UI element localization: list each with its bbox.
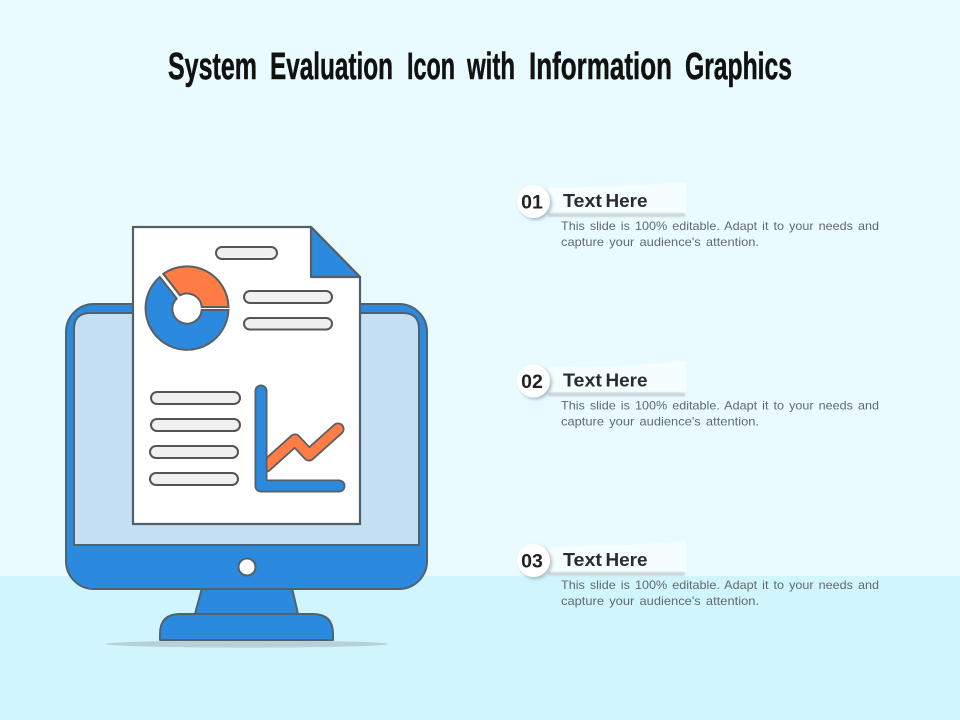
title: with: [466, 46, 515, 88]
item body: capture your audience's attention.: [561, 594, 759, 608]
item 01: [517, 182, 879, 249]
item 02: [517, 362, 879, 428]
item 02: 02: [521, 371, 543, 393]
number badge: [517, 364, 550, 398]
item body: This slide is 100% editable. Adapt it to your needs and: [561, 219, 879, 233]
document page: [133, 227, 360, 524]
item body: capture your audience's attention.: [561, 414, 759, 428]
title: Graphics: [685, 46, 792, 88]
item heading: Text: [563, 370, 602, 390]
title: Evaluation: [270, 46, 393, 88]
monitor screen: [74, 313, 419, 545]
number badge: [517, 544, 550, 577]
item heading: Here: [606, 191, 648, 211]
item 01: 01: [521, 192, 543, 214]
item heading: Text: [563, 191, 602, 211]
item heading: Text: [563, 550, 602, 570]
number badge: [517, 185, 550, 218]
item heading: Here: [606, 370, 648, 390]
item heading: [563, 550, 648, 570]
item body: capture your audience's attention.: [561, 235, 759, 249]
item body: [561, 578, 879, 608]
document fold: [311, 227, 360, 277]
item body: This slide is 100% editable. Adapt it to your needs and: [561, 398, 879, 412]
tab: [548, 182, 686, 213]
item 03: 03: [521, 550, 543, 572]
title: Information: [529, 46, 672, 88]
item heading: [563, 370, 648, 390]
text placeholder bars: [150, 247, 332, 485]
icon: monitor with document: [66, 227, 427, 648]
item body: This slide is 100% editable. Adapt it to your needs and: [561, 578, 879, 592]
tab: [548, 362, 686, 392]
monitor body: [66, 304, 427, 589]
line chart: [261, 391, 339, 486]
donut chart: [146, 266, 228, 350]
title: System: [168, 46, 257, 88]
monitor shadow: [106, 640, 388, 648]
item heading: Here: [606, 550, 648, 570]
item body: [561, 398, 879, 428]
document: [133, 227, 360, 524]
title: [168, 46, 792, 88]
monitor button: [238, 558, 256, 576]
tab: [548, 541, 686, 572]
title: Icon: [407, 46, 455, 88]
item heading: [563, 191, 648, 211]
monitor stand: [160, 588, 333, 640]
item body: [561, 219, 879, 249]
item 03: [517, 541, 879, 608]
